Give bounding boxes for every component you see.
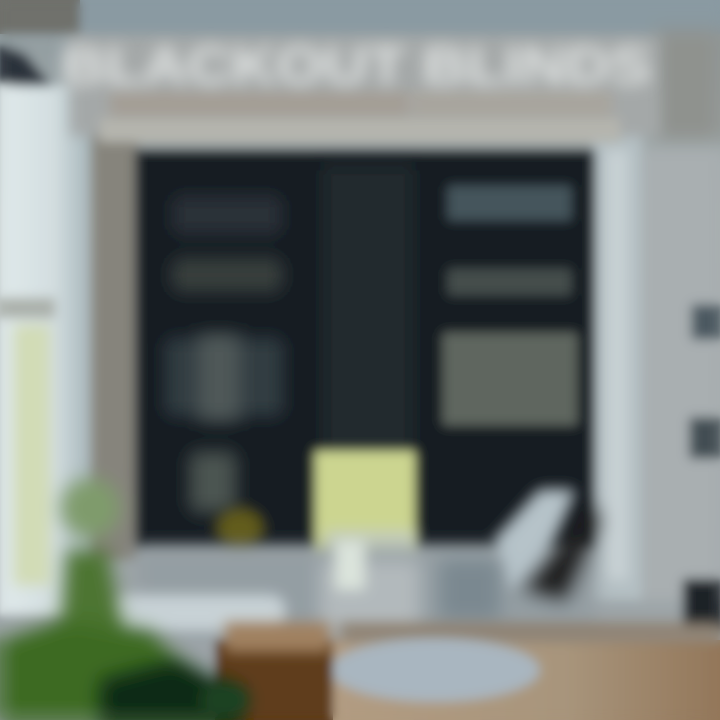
rug [330, 638, 540, 702]
floor [330, 622, 720, 720]
left window [0, 45, 90, 615]
yellow picture [314, 450, 416, 570]
chair [440, 490, 600, 620]
window frame [92, 130, 642, 600]
yellow flower [216, 508, 264, 548]
blackout blind panels [136, 150, 594, 548]
sofa and cushions [110, 540, 596, 638]
wall shelves [684, 305, 720, 630]
pelmet [70, 36, 660, 142]
green plant [0, 478, 250, 720]
wooden table [215, 622, 333, 720]
title: BLACKOUT BLINDS [61, 36, 651, 96]
